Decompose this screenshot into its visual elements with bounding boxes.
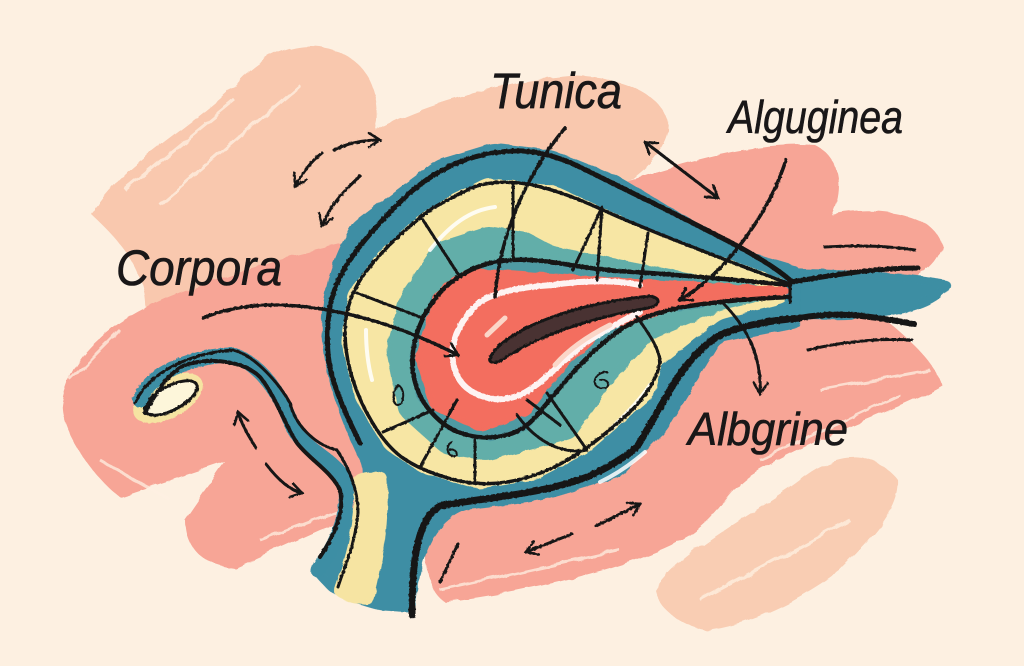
white crescent highlight	[452, 281, 640, 399]
arrow: Alguginea pointer	[680, 160, 786, 300]
yellow stem stripe	[333, 471, 388, 605]
label: Corpora: Corpora	[116, 240, 282, 296]
teal outer body	[312, 143, 800, 612]
yellow layer	[341, 178, 787, 489]
black outlines	[327, 151, 918, 615]
panel: peach brush wash, lower right	[655, 457, 898, 630]
outer outline	[327, 151, 790, 443]
teal inner layer	[386, 226, 760, 461]
arrow: Corpora pointer	[203, 305, 458, 355]
red core	[415, 268, 790, 432]
panel: salmon brush wash, centre	[62, 145, 942, 602]
lower thick outline	[412, 318, 800, 615]
dark slit	[490, 296, 658, 363]
radial ticks	[357, 183, 660, 483]
label: Tunica: Tunica	[490, 63, 622, 119]
dark teal ring	[409, 256, 720, 441]
brush highlights	[70, 85, 930, 600]
line: Tunica pointer	[495, 128, 565, 297]
inner yellow outline	[345, 182, 787, 484]
panel: brush washes	[62, 46, 942, 630]
tail outlines	[790, 268, 918, 282]
label: Albgrine: Albgrine	[685, 403, 848, 455]
label lines	[203, 128, 786, 355]
panel: peach brush wash, upper left	[92, 46, 668, 320]
icon: small loop duct at left	[125, 350, 358, 587]
teal tail	[770, 268, 952, 320]
scribbles	[394, 372, 608, 456]
diagram: bulb body with stem and tail	[312, 143, 952, 612]
white paint streaks	[366, 207, 650, 482]
core ring outline	[412, 260, 790, 438]
label: Alguginea: Alguginea	[725, 91, 903, 143]
arrows: double-headed motion arrows	[238, 140, 915, 582]
